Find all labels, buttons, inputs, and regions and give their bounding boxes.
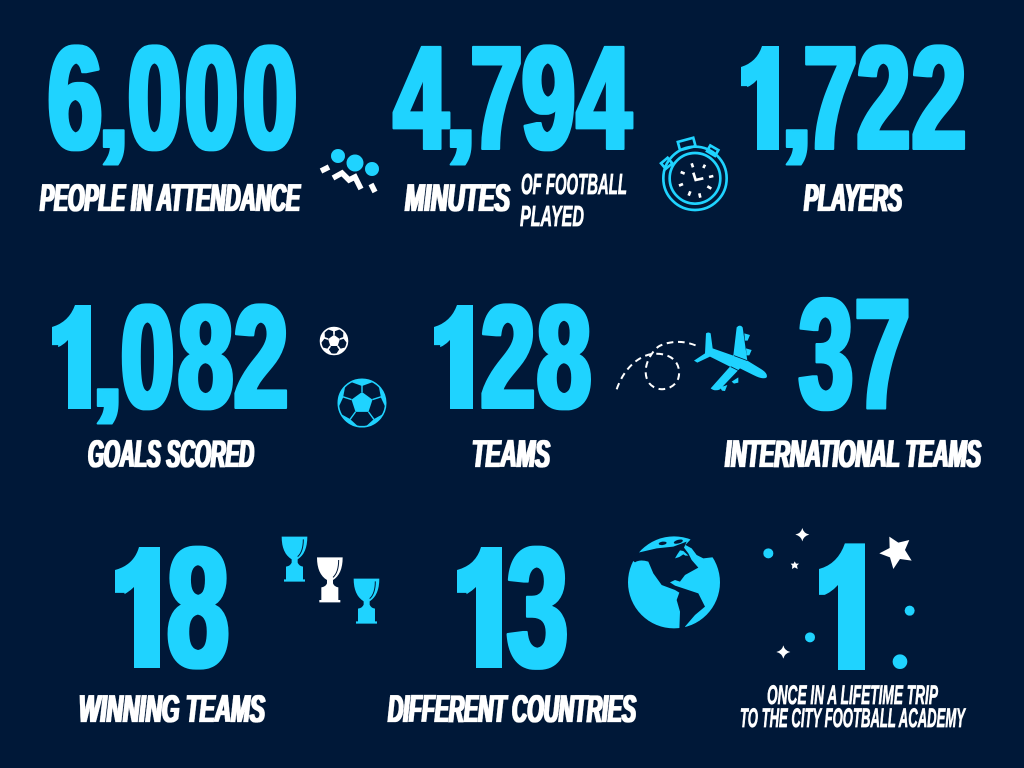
label: different countries: DIFFERENT COUNTRIES [388,688,636,731]
stat: 6,000: 0 [243,16,297,180]
stat: 1,722: 2 [912,16,966,180]
icon: trophy right [354,579,379,624]
label: of football played: PLAYED [520,201,584,233]
stat: 6,000: 0 [128,16,181,180]
stat: 13: 1 [454,512,512,703]
icon: globe [628,536,722,630]
stat: 1: 1 [816,514,874,705]
stat: 1,082: 2 [234,276,288,440]
stat: 1,082: 8 [178,276,233,440]
stat: 6,000: 6 [48,16,102,180]
stat: 37: 3 [799,267,853,442]
label: people in attendance: PEOPLE IN ATTENDANCE [40,177,301,220]
stat: 4,794: 7 [471,16,522,180]
stat: 6,000: , [98,46,129,171]
stat: 37: 7 [855,267,910,442]
stat: 4,794: , [445,46,476,171]
icon: small football [321,328,347,354]
label: once in a lifetime trip [740,680,966,733]
stat: 1,722: 7 [804,16,857,180]
label: goals scored: GOALS SCORED [88,433,254,476]
stat: 1,722: , [781,46,812,171]
label: teams: TEAMS [472,433,550,476]
stat: 18 [115,546,229,670]
label: of football played: OF FOOTBALL [521,169,627,201]
stat: 1,082 [52,303,288,424]
stat: 13 [457,546,567,670]
icon: stars and dots [763,528,915,669]
icon: three trophies [282,537,379,624]
stat: 128: 8 [537,276,591,440]
icon: trophy centre [317,557,343,602]
stat: 6,000: 0 [185,16,238,180]
stat: 13: 3 [507,512,568,704]
stat: 6,000 [48,16,297,180]
stat: 1,082: 1 [49,275,99,439]
icon: plane with dashed flight path [617,326,767,391]
stat: 18: 8 [167,512,229,704]
icon: trophy left [282,537,307,582]
stat: 128 [434,303,591,410]
stat: 18: 1 [112,512,170,703]
label: players: PLAYERS [804,177,902,220]
icon: crowd [321,149,379,192]
icon: stopwatch [661,138,727,210]
stat: 4,794: 4 [577,16,631,180]
stat: 4,794 [394,16,631,180]
stat: 128: 2 [481,276,535,440]
stat: 4,794: 4 [394,16,448,180]
icon: large football [338,379,386,427]
label: of football played [520,169,627,233]
stat: 1,722: 2 [857,16,910,180]
stat: 1,722: 1 [738,16,788,180]
stat: 4,794: 9 [522,16,575,180]
stat: 1,082: 0 [121,276,174,440]
label: winning teams: WINNING TEAMS [79,688,265,731]
stat: 1,082: , [92,305,123,430]
stat: 1,722 [741,44,966,166]
stat: 128: 1 [431,275,481,439]
label: minutes: MINUTES [405,177,510,220]
